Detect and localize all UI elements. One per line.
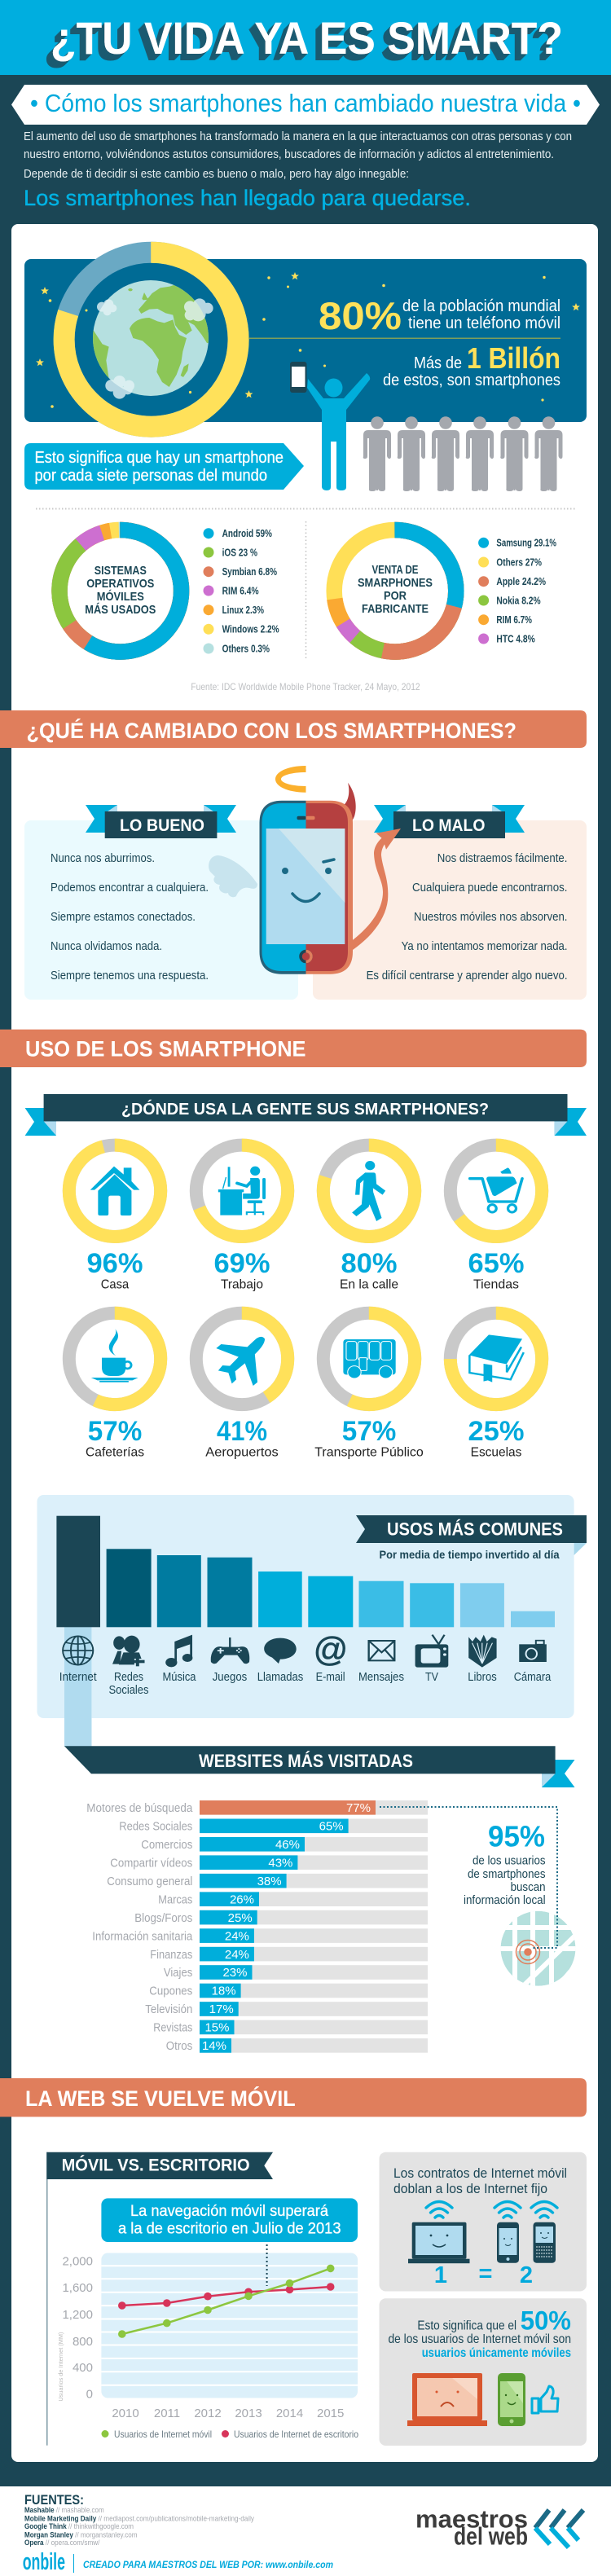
donut title: manufacturers [358,563,433,616]
list: bad things: Nuestros móviles nos absorven. [414,910,567,924]
list: good things: Podemos encontrar a cualquiera. [51,881,209,895]
panel: 50 percent [380,2298,587,2446]
icon: sad laptop [407,2373,487,2426]
heading: web goes mobile: LA WEB SE VUELVE MÓVIL [25,2086,296,2111]
bar chart: websites: Marcas [158,1892,192,1906]
y axis title: Usuarios de Internet (MM) [57,2332,64,2402]
equation: 1 [434,2262,447,2288]
usage ring: tiendas: Tiendas [473,1277,519,1291]
chart legend: Usuarios de Internet de escritorio [234,2429,358,2440]
x axis labels: 2014 [276,2407,303,2420]
panel: 50 percent: 50% [521,2306,571,2335]
usage ring: casa [69,1145,160,1291]
donut title: operating systems: MÁS USADOS [85,603,156,617]
panel: 50 percent: Esto significa que el [417,2319,516,2332]
equation [434,2261,533,2288]
x axis labels: 2013 [235,2407,262,2420]
icon labels: Música [163,1670,196,1684]
bar chart: websites: 24% [225,1948,249,1962]
panel: mobile contracts: Los contratos de Internet móvil [393,2166,567,2181]
panel: mobile contracts [380,2152,587,2291]
donut title: operating systems: SISTEMAS [95,564,147,578]
icon labels: Juegos [213,1670,247,1684]
icon: blackberry [533,2222,556,2263]
usage ring: trabajo: Trabajo [221,1277,263,1291]
icon labels: E-mail [316,1670,345,1684]
legend: manufacturers: Samsung 29.1% [496,537,556,549]
bar chart: websites: Compartir vídeos [110,1856,192,1870]
legend: manufacturers: HTC 4.8% [496,632,535,644]
usage ring: transporte [314,1313,424,1460]
bar chart: websites: 77% [346,1801,371,1815]
list: bad things: Cualquiera puede encontrarnos. [412,881,567,895]
bar chart: websites: Motores de búsqueda [86,1801,193,1815]
icon: laptop [408,2222,469,2263]
logo: maestros del web: maestros [415,2505,528,2534]
donut title: operating systems [85,564,156,617]
stars [36,272,580,408]
icon labels: Sociales [109,1683,148,1697]
usage ring: escuelas [451,1313,542,1460]
icons: wifi [426,2201,557,2218]
bar chart: websites: Información sanitaria [92,1929,193,1943]
bar chart: websites: 26% [230,1892,254,1906]
y axis labels: 1,200 [62,2308,93,2322]
icon: map with target [500,1911,575,1986]
icon labels: Llamadas [257,1670,303,1684]
chart legend: Usuarios de Internet móvil [114,2429,212,2440]
equation: 2 [520,2262,533,2288]
legend: operating systems: Linux 2.3% [222,604,264,616]
bar chart: websites: Comercios [141,1838,192,1852]
bar chart: websites: Cupones [149,1985,192,1998]
list: bad things: Es difícil centrarse y aprender algo nuevo. [367,969,567,982]
x axis labels: 2011 [154,2407,180,2420]
icon: devil horn [341,783,356,824]
icon: smartphone [497,2222,519,2263]
footer: sources: Google Think // thinkwithgoogle.com [24,2522,134,2530]
line chart [57,2244,358,2440]
y axis labels: 1,600 [62,2281,93,2295]
footer: sources: Morgan Stanley // morganstanley.com [24,2530,137,2539]
icon: thumb up [532,2386,558,2413]
callout: mobile overtakes: a la de escritorio en Julio de 2013 [118,2220,341,2237]
icon: social [112,1636,145,1666]
donut title: operating systems: OPERATIVOS [86,577,154,591]
icon: open book [468,1635,497,1668]
icon: envelope [369,1641,394,1660]
usage ring: en la calle: 80% [341,1248,398,1279]
icon labels: Redes [114,1670,143,1684]
stat: 1 billon: Más de [414,354,462,372]
legend: operating systems: iOS 23 % [222,546,257,559]
icon: desk worker [218,1167,266,1215]
y axis labels: 2,000 [62,2255,93,2268]
icon: tv [415,1635,448,1668]
stat: 1 billon: 1 Billón [467,341,560,375]
icon: gamepad [211,1637,249,1664]
icon labels: TV [425,1670,438,1684]
logo: onbile: onbile [23,2549,65,2575]
ribbon: lo bueno [86,805,236,838]
bar chart: websites: Revistas [153,2021,192,2035]
usage ring: transporte: Transporte Público [314,1445,424,1460]
chart legend [101,2429,358,2440]
icon: book [469,1334,524,1383]
stat: 80 percent caption [402,297,560,332]
stat: 80 percent: 80% [319,294,402,337]
stat: 1 billon: de estos, son smartphones [383,371,560,389]
list: bad things [367,851,567,982]
connector to websites section [64,1627,91,1747]
usage ring: aeropuertos [196,1313,288,1460]
bar chart: websites: 18% [212,1985,236,1998]
list: good things [51,851,209,982]
intro text [24,130,572,181]
ribbon: where people use phones: ¿DÓNDE USA LA GENTE SUS SMARTPHONES? [121,1099,489,1119]
list: bad things: Ya no intentamos memorizar nada. [402,939,567,953]
usage ring: cafeterias: 57% [88,1416,142,1447]
icon: halo [275,766,306,793]
bar chart: websites: 38% [257,1875,282,1888]
equation: = [479,2261,492,2287]
intro text: nuestro entorno, volviéndonos astutos consumidores, buscadores de información y adictos al entretenimiento. [24,147,554,161]
icon: plane [216,1337,265,1386]
usage ring: aeropuertos: 41% [217,1416,267,1447]
ribbon: most common uses: USOS MÁS COMUNES [387,1519,563,1540]
bar chart: websites: Consumo general [107,1875,192,1888]
stat: 95 percent: de smartphones [468,1867,546,1881]
bar chart: websites: 15% [204,2021,230,2035]
icon: bus [343,1339,396,1378]
bar chart: websites: 65% [319,1820,344,1833]
bar chart: websites: 46% [275,1838,300,1852]
donut title: manufacturers: VENTA DE [371,563,419,577]
panel: 50 percent: usuarios únicamente móviles [422,2346,571,2360]
header band [0,0,611,75]
heading: what changed: ¿QUÉ HA CAMBIADO CON LOS SMARTPHONES? [26,718,516,743]
ribbon: most common uses [356,1515,587,1555]
callout: one in seven [24,443,304,490]
icon: angel-devil phone [259,801,353,974]
bar chart: websites: 14% [202,2039,226,2053]
usage ring: aeropuertos: Aeropuertos [205,1445,279,1460]
subtitle ribbon [11,85,600,125]
ribbon: lo malo [374,805,525,838]
donut title: manufacturers: SMARPHONES [358,576,433,590]
icon labels: Mensajes [358,1670,404,1684]
usage ring: cafeterias: Cafeterías [86,1445,144,1460]
icon labels: Internet [59,1670,97,1684]
chart: manufacturers donut [334,530,456,652]
x axis labels [112,2407,344,2420]
series: mobile [118,2265,335,2338]
usage ring: en la calle: En la calle [340,1277,398,1291]
icon: grey people [363,416,562,491]
subtitle: time spent: Por media de tiempo invertido al día [380,1548,560,1561]
x axis labels: 2015 [317,2407,344,2420]
source note: Fuente: IDC Worldwide Mobile Phone Tracker, 24 Mayo, 2012 [191,681,420,692]
icon labels [59,1670,552,1697]
bar chart: websites: Blogs/Foros [134,1911,192,1925]
usage ring: trabajo: 69% [213,1248,270,1279]
ribbon: websites: WEBSITES MÁS VISITADAS [199,1751,413,1771]
bar chart: websites: Viajes [164,1966,192,1980]
bar chart: websites [86,1800,428,2053]
list: bad things: Nos distraemos fácilmente. [437,851,567,865]
connector below panel [64,1718,91,1747]
usage ring: escuelas: Escuelas [471,1445,521,1460]
title: ¿TU VIDA YA ES SMART? [51,12,563,64]
list: good things: Nunca olvidamos nada. [51,939,162,953]
callout: one in seven: por cada siete personas del mundo [34,467,267,485]
icon: house [90,1167,139,1215]
footer: sources [24,2492,254,2547]
usage ring: en la calle [323,1145,415,1291]
logo: maestros del web [415,2505,583,2550]
bar chart: websites: 17% [209,2002,234,2016]
callout: one in seven: Esto significa que hay un smartphone [34,449,284,467]
panel: 50 percent: de los usuarios de Internet móvil son [388,2332,571,2346]
icon labels: Cámara [514,1670,552,1684]
lower white panel [11,815,598,2462]
ribbon: mobile vs desktop [46,2152,273,2446]
callout: mobile overtakes [101,2198,358,2242]
stat: 1 billon [383,341,560,389]
intro text: Depende de ti decidir si este cambio es bueno o malo, pero hay algo innegable: [24,167,409,181]
logo: maestros del web: del web [454,2521,528,2550]
bar chart: websites: 25% [228,1911,253,1925]
footer: sources: Mashable // mashable.com [24,2506,104,2514]
heading: smartphone use [0,1030,587,1067]
legend: manufacturers [478,537,556,644]
panel: world stats [24,253,587,427]
bar chart: websites: 43% [268,1856,292,1870]
legend: operating systems: Symbian 6.8% [222,565,277,578]
icon: walker [352,1161,385,1221]
stat: 95 percent: buscan [511,1880,546,1894]
ribbon: lo bueno: LO BUENO [120,816,204,835]
stat: 95 percent: 95% [488,1820,545,1853]
usage ring: tiendas: 65% [468,1248,525,1279]
heading: web goes mobile [0,2078,587,2117]
ribbon: websites [64,1746,575,1787]
bar chart: uses [56,1516,555,1627]
callout: mobile overtakes: La navegación móvil superará [130,2203,328,2220]
usage ring: trabajo [196,1145,288,1291]
ribbon: where people use phones [25,1094,587,1136]
panel: mobile contracts: doblan a los de Internet fijo [393,2182,547,2196]
legend: manufacturers: Nokia 8.2% [496,594,541,606]
stat: 95 percent [464,1820,546,1907]
bar chart: websites: 23% [222,1966,248,1980]
icon: speech bubble [264,1638,297,1664]
footer: sources: FUENTES: [24,2492,84,2508]
series: desktop [118,2283,335,2310]
icon: wing [209,855,257,897]
icon: camera [519,1641,547,1662]
dotted leader line [380,1807,557,1948]
bar chart: websites: Televisión [145,2002,192,2016]
legend: operating systems [204,527,279,655]
x axis labels: 2012 [194,2407,222,2420]
footer: sources: Mobile Marketing Daily // mediapost.com/publications/mobile-marketing-daily [24,2514,254,2522]
y axis labels: 800 [73,2335,93,2349]
y axis labels: 0 [86,2388,93,2402]
legend: operating systems: Windows 2.2% [222,623,279,635]
stat: 95 percent: información local [464,1893,546,1907]
list: good things: Siempre tenemos una respuesta. [51,969,209,982]
x axis labels: 2010 [112,2407,139,2420]
bar chart: websites: Finanzas [150,1948,192,1962]
icon: coffee [91,1329,138,1383]
y axis labels: 400 [73,2361,93,2375]
usage ring: transporte: 57% [342,1416,396,1447]
list: good things: Siempre estamos conectados. [51,910,196,924]
stat: 80 percent caption: tiene un teléfono móvil [408,314,560,332]
footer: sources: Opera // opera.com/smw/ [24,2539,100,2547]
stat: 95 percent: de los usuarios [473,1854,546,1868]
usage icons, top row [90,1161,522,1221]
icon: happy phone [498,2373,525,2426]
icon: devil tail [350,829,401,952]
uses icons [63,1635,547,1668]
icon "@": @ [314,1630,348,1668]
bar chart: websites: Redes Sociales [119,1820,192,1833]
donut title: operating systems: MÓVILES [97,589,144,604]
usage ring: escuelas: 25% [468,1416,525,1447]
legend: operating systems: Android 59% [222,527,272,539]
usage ring: casa: Casa [101,1277,129,1291]
donut: 80 percent ring [64,253,239,427]
icon: globe [63,1636,93,1665]
donut title: manufacturers: FABRICANTE [362,602,429,616]
legend: operating systems: RIM 6.4% [222,585,259,596]
panel: lo bueno [24,820,298,1000]
donut title: manufacturers: POR [384,589,407,603]
legend: manufacturers: Apple 24.2% [496,575,546,587]
ribbon: lo malo: LO MALO [412,816,486,835]
usage ring: cafeterias [69,1313,160,1460]
chart: operating systems donut [59,530,182,652]
heading: what changed [0,710,587,748]
bar chart: websites: Otros [166,2039,192,2053]
stat: 80 percent caption: de la población mundial [402,297,560,315]
list: good things: Nunca nos aburrimos. [51,851,155,865]
icon: blue person [307,373,370,490]
legend: operating systems: Others 0.3% [222,642,270,655]
ribbon: mobile vs desktop: MÓVIL VS. ESCRITORIO [62,2155,250,2174]
y axis labels [62,2255,93,2402]
main white panel [11,224,598,833]
icon: music [165,1635,192,1667]
usage icons, bottom row [91,1329,524,1386]
divider [249,337,560,339]
heading: smartphone use: USO DE LOS SMARTPHONE [25,1036,306,1061]
intro highlight: Los smartphones han llegado para quedarse. [24,186,471,210]
credit line: CREADO PARA MAESTROS DEL WEB POR: www.onbile.com [83,2559,333,2570]
icon: shopping cart [470,1167,522,1212]
panel: lo malo [313,820,587,1000]
usage ring: tiendas [451,1145,542,1291]
icon: phone held up [290,362,306,393]
legend: manufacturers: Others 27% [496,556,542,568]
legend: manufacturers: RIM 6.7% [496,613,532,626]
panel: most common uses [37,1495,587,1747]
bar chart: websites: 24% [225,1929,249,1943]
icon: earth [93,280,213,399]
usage ring: casa: 96% [86,1248,143,1279]
icon labels: Libros [468,1670,497,1684]
